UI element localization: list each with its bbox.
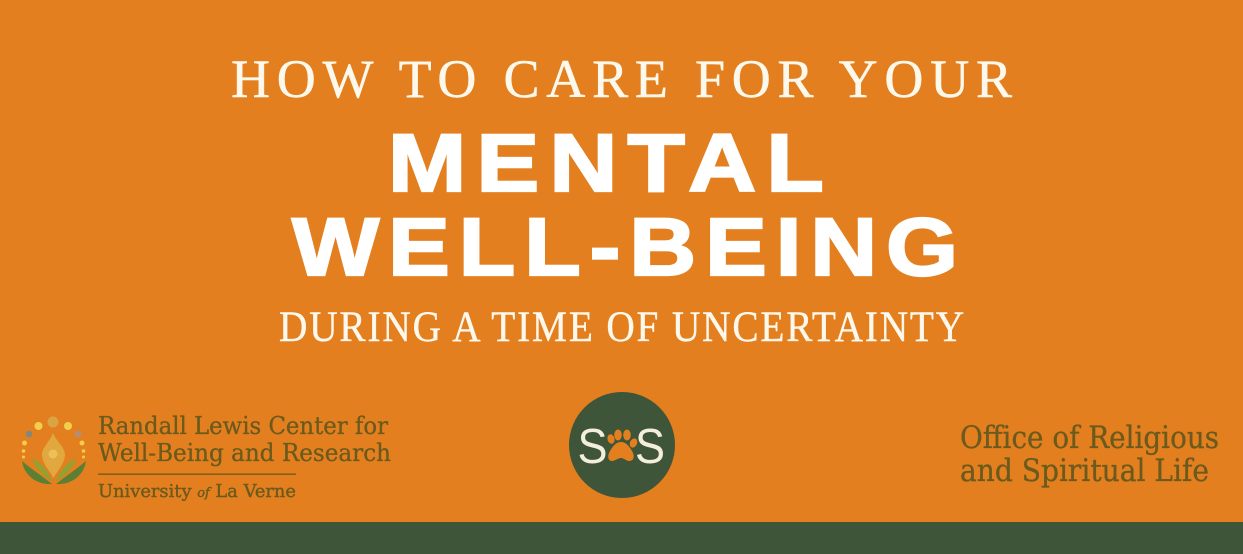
logo text: center name: Randall Lewis Center for xyxy=(98,411,388,440)
logo: SOS circle with paw xyxy=(569,392,675,498)
title: well-being: WELL-BEING xyxy=(292,202,967,293)
footer bar xyxy=(0,522,1243,554)
title: mental: MENTAL xyxy=(388,118,834,209)
logo: office of religious and spiritual life: and Spiritual Life xyxy=(960,453,1209,489)
logo: office of religious and spiritual life: Office of Religious xyxy=(960,420,1219,456)
title: how to care for your: HOW TO CARE FOR YOUR xyxy=(231,49,1012,109)
icon: paw xyxy=(606,430,639,461)
sos letters: S xyxy=(578,420,608,474)
logo: Randall Lewis Center: Well-Being and Research xyxy=(98,438,391,467)
icon: lotus figure with dots xyxy=(22,416,86,484)
logo: office of religious and spiritual life xyxy=(960,420,1219,489)
logo text: university: University of La Verne xyxy=(98,481,296,502)
subtitle: during a time of uncertainty: DURING A TIME OF UNCERTAINTY xyxy=(279,304,966,351)
logo: Randall Lewis Center xyxy=(22,411,391,502)
logo: SOS circle with paw: S xyxy=(635,420,665,474)
